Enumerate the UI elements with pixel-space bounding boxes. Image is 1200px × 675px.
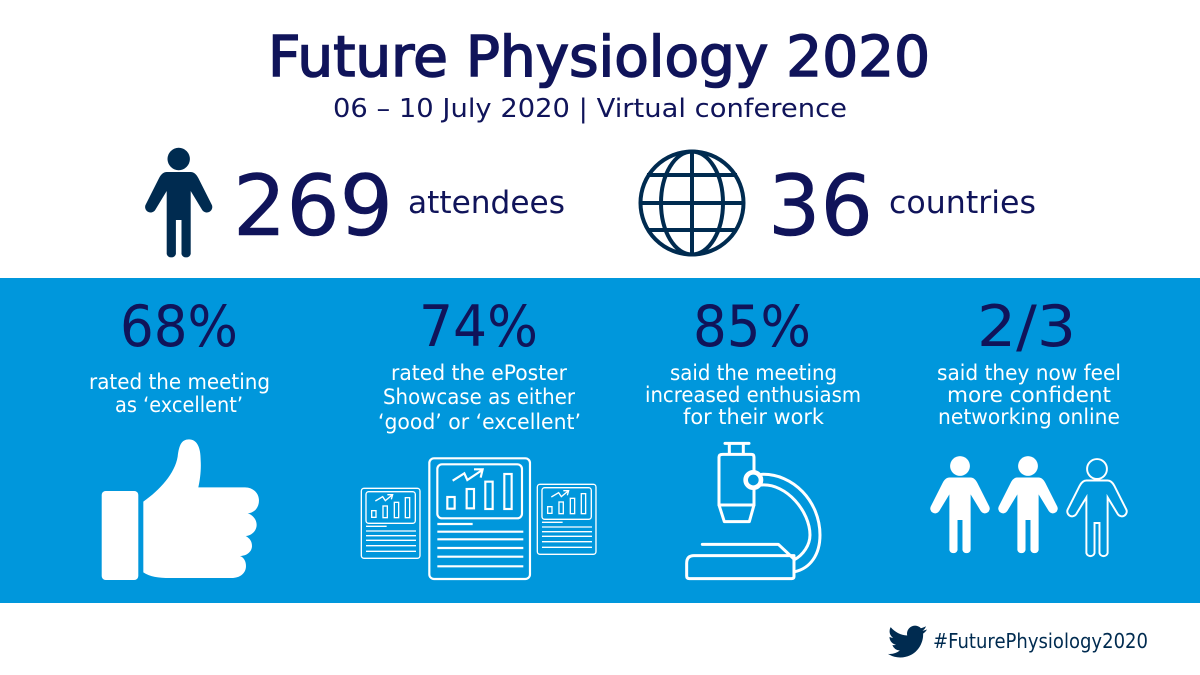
stat: attendees label: attendees — [408, 185, 565, 221]
person: outline — [1067, 459, 1127, 556]
icon: person — [145, 148, 212, 257]
caption: ePoster rating: Showcase as either — [383, 385, 575, 409]
figure: 74%: 74% — [419, 294, 538, 360]
caption: meeting rating — [89, 370, 270, 417]
icon: thumbs up — [102, 439, 259, 580]
icon: twitter bird — [888, 626, 927, 657]
icon: globe — [640, 152, 744, 254]
figure: 2/3: 2/3 — [977, 294, 1076, 360]
figure: 85%: 85% — [693, 294, 811, 360]
caption: meeting rating: rated the meeting — [89, 370, 270, 394]
panel: 68 percent — [89, 294, 270, 580]
caption: networking confidence: more confident — [947, 383, 1111, 407]
person: filled one — [930, 456, 990, 553]
panel: 85 percent — [645, 294, 861, 579]
caption: enthusiasm: said the meeting — [670, 361, 837, 385]
title: Future Physiology 2020 — [268, 25, 930, 90]
stat: attendees count: 269 — [233, 157, 393, 255]
blue band panel — [0, 278, 1200, 603]
caption: meeting rating: as ‘excellent’ — [115, 393, 243, 417]
caption: ePoster rating: ‘good’ or ‘excellent’ — [378, 410, 581, 434]
caption: networking confidence — [937, 361, 1121, 429]
stat: countries label: countries — [889, 185, 1036, 221]
stat: countries count: 36 — [768, 157, 873, 255]
poster: centre — [429, 458, 530, 579]
caption: networking confidence: networking online — [938, 405, 1120, 429]
figure: 68%: 68% — [120, 294, 238, 360]
panel: two thirds — [930, 294, 1127, 556]
poster: left — [361, 488, 420, 558]
caption: enthusiasm: for their work — [683, 405, 825, 429]
icon: microscope — [687, 443, 820, 579]
person: filled two — [998, 456, 1058, 553]
icon: people two of three — [930, 456, 1127, 556]
icon: posters — [361, 458, 596, 579]
caption: enthusiasm: increased enthusiasm — [645, 383, 861, 407]
subtitle: 06 – 10 July 2020 | Virtual conference — [333, 94, 847, 124]
panel: 74 percent — [361, 294, 596, 579]
caption: enthusiasm — [645, 361, 861, 429]
caption: ePoster rating — [378, 361, 581, 434]
hashtag: #FuturePhysiology2020 — [933, 629, 1148, 653]
poster: right — [537, 484, 596, 554]
caption: ePoster rating: rated the ePoster — [391, 361, 567, 385]
caption: networking confidence: said they now feel — [937, 361, 1121, 385]
